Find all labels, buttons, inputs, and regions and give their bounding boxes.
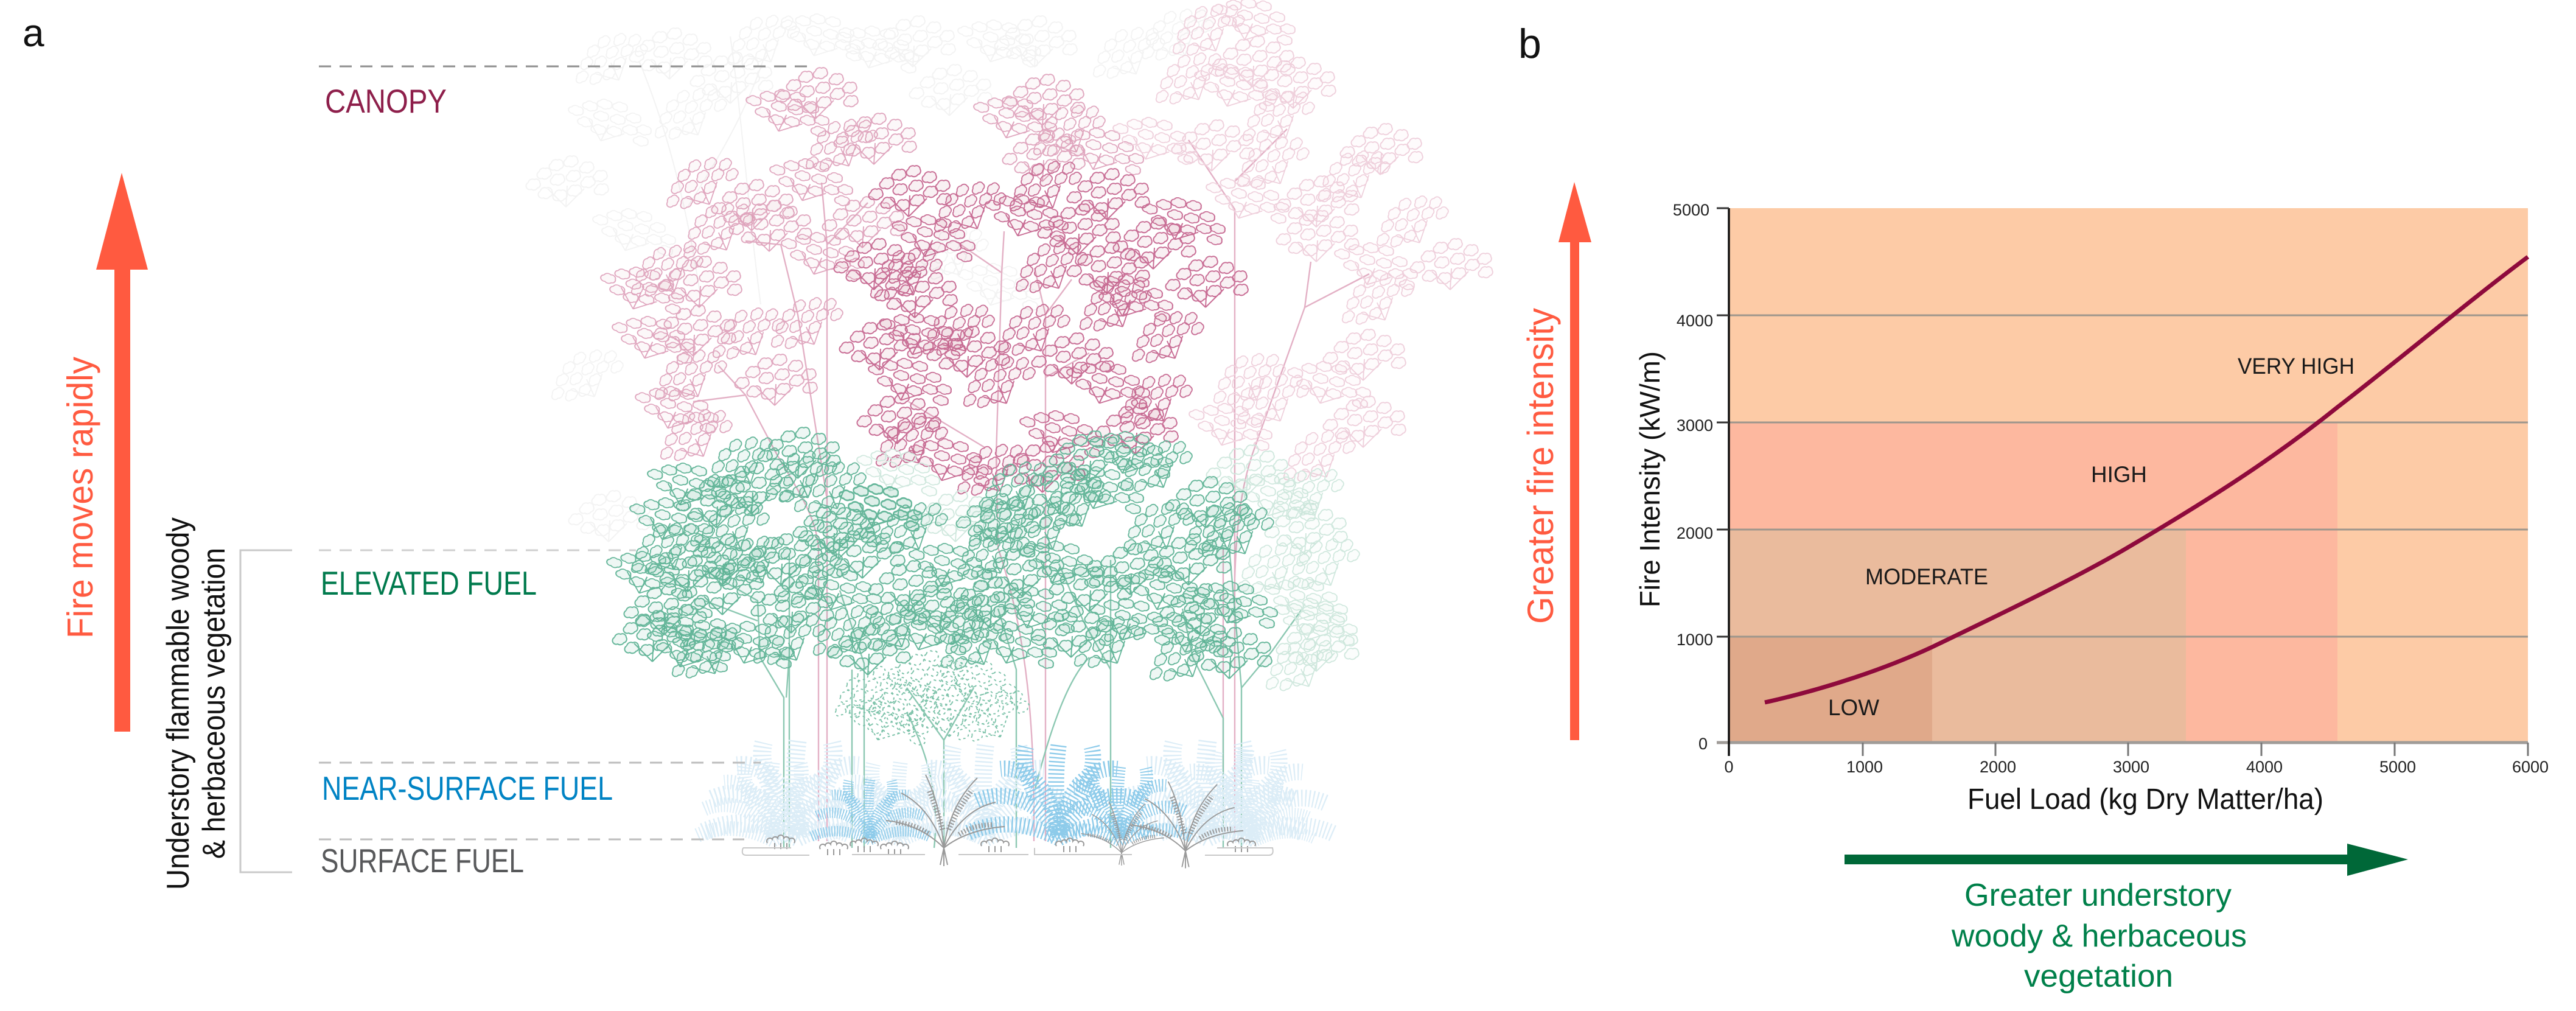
elevated fuel foliage: main crowns (600, 418, 1285, 694)
canopy foliage: right crowns (1106, 0, 1493, 495)
label: near-surface fuel: NEAR-SURFACE FUEL (322, 769, 613, 807)
canopy foliage: centre crowns (834, 149, 1248, 509)
x axis: 6000 (2512, 758, 2549, 776)
x axis: 4000 (2246, 758, 2283, 776)
plot region: low (1729, 637, 1932, 743)
x axis: 0 (1724, 758, 1734, 776)
label: low: LOW (1828, 695, 1879, 720)
label: high: HIGH (2091, 462, 2147, 487)
canopy foliage: left and upper crowns (594, 68, 1151, 474)
label: elevated fuel: ELEVATED FUEL (321, 564, 537, 602)
x axis: 2000 (1980, 758, 2016, 776)
plot region: high (1729, 422, 2337, 743)
arrow: fire moves rapidly (96, 173, 148, 732)
label: greater fire intensity: Greater fire intensity (1520, 308, 1561, 624)
arrow: greater understory vegetation (1845, 844, 2408, 876)
label: canopy: CANOPY (325, 82, 447, 120)
near-surface fuel: pale ferns (697, 739, 1334, 842)
label: understory vegetation: Understory flammable woody (161, 517, 196, 890)
label: greater understory vegetation: vegetation (2024, 959, 2173, 994)
y axis: 5000 (1673, 201, 1709, 219)
panel a: forest fuel layers (23, 0, 1493, 890)
y axis: 3000 (1677, 416, 1713, 435)
y axis title: Fire Intensity (kW/m) (1634, 351, 1666, 607)
y axis: 1000 (1677, 631, 1713, 649)
near-surface fuel: saturated ferns (811, 743, 1192, 841)
x axis: 5000 (2379, 758, 2416, 776)
label: surface fuel: SURFACE FUEL (321, 842, 524, 880)
x axis: 1000 (1846, 758, 1883, 776)
panel letter a: a (23, 11, 44, 55)
label: understory vegetation (161, 517, 232, 890)
x axis (1717, 743, 2549, 776)
panel letter b: b (1518, 21, 1541, 67)
x axis title: Fuel Load (kg Dry Matter/ha) (1967, 783, 2323, 816)
y axis (1673, 201, 1729, 756)
curve: fire intensity (1765, 257, 2528, 702)
elevated fuel trunks and branches (705, 548, 1302, 848)
panel b: fire intensity chart (1518, 21, 2549, 994)
label: greater understory vegetation (1951, 878, 2247, 994)
faint background canopy (526, 0, 1221, 542)
plot region: moderate (1729, 530, 2186, 743)
label: understory vegetation: & herbaceous vegetation (197, 548, 232, 859)
canopy trunks and branches (693, 129, 1369, 841)
elevated fuel foliage: light crowns (850, 435, 1367, 704)
lower dotted tree crown (823, 644, 1036, 757)
y axis: 0 (1698, 735, 1708, 753)
arrow: greater fire intensity (1559, 182, 1591, 740)
label: greater understory vegetation: woody & herbaceous (1951, 918, 2247, 954)
dashed level guides (319, 66, 809, 839)
surface fuel: ground plants (742, 775, 1273, 868)
label: moderate: MODERATE (1865, 564, 1988, 589)
gridlines (1729, 315, 2528, 637)
label: greater understory vegetation: Greater understory (1964, 878, 2232, 913)
label: very high: VERY HIGH (2238, 354, 2354, 379)
plot region: very high (1729, 208, 2528, 743)
chart: fire intensity vs fuel load (1634, 201, 2549, 816)
bracket: understory extent (240, 550, 292, 872)
label: fire moves rapidly: Fire moves rapidly (60, 357, 100, 638)
x axis: 3000 (2113, 758, 2149, 776)
tree illustration (526, 0, 1493, 869)
y axis: 4000 (1677, 312, 1713, 330)
y axis: 2000 (1677, 524, 1713, 542)
